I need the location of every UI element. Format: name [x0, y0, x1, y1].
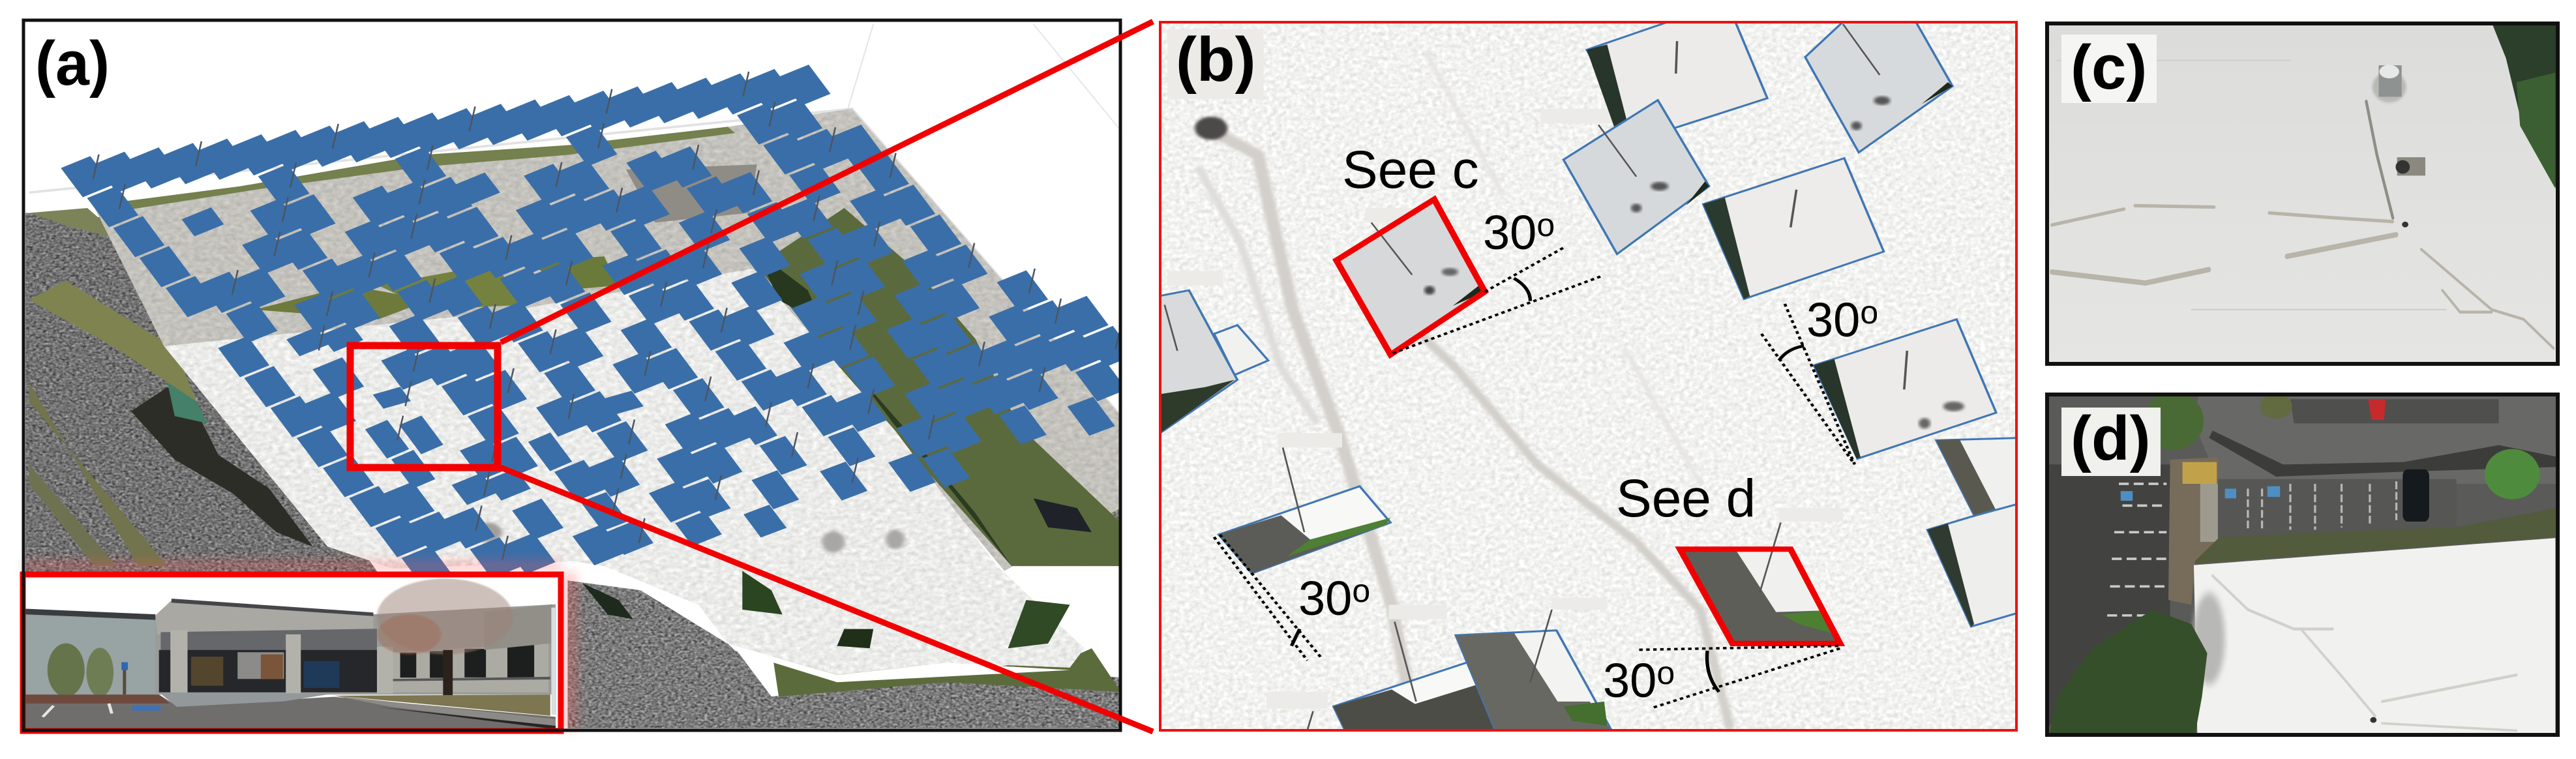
- smudge bars: [1167, 29, 1956, 709]
- cracks: [2052, 61, 2554, 348]
- label (b): (b): [1176, 25, 1256, 95]
- panel (c): oblique photo of roof: [2046, 23, 2559, 366]
- label background (d): [2061, 408, 2161, 476]
- top parking lot: [2195, 394, 2559, 484]
- red selection box on roof: [350, 346, 498, 468]
- trees: [2485, 449, 2540, 499]
- zoom connector lines: [501, 22, 1153, 732]
- sidewalk and mulch: [2168, 457, 2218, 605]
- panel (a): point cloud with camera positions: [23, 20, 1255, 731]
- lower parking lot: [2218, 479, 2457, 537]
- annotation see c: See c: [1342, 140, 1479, 200]
- camera frame 4: [1703, 158, 1884, 299]
- angle label 3: o: [1352, 573, 1370, 609]
- roof cracks: [1199, 53, 1730, 726]
- left camera frames: [1159, 290, 1268, 434]
- trees: [2492, 23, 2559, 194]
- inset glow: [23, 561, 577, 730]
- right camera frames: [1928, 438, 2020, 627]
- angle label 1: 30: [1483, 205, 1536, 260]
- camera frame see c: [1336, 200, 1485, 355]
- panel (d): nadir photo of roof and parking: [2046, 392, 2559, 736]
- point cloud ground and roof: [25, 24, 1121, 728]
- panel frame (b): [1160, 22, 2016, 730]
- hedge: [2195, 508, 2555, 563]
- roof texture: [1159, 22, 2018, 730]
- bottom camera frames: [1334, 631, 1613, 733]
- left pavement: [2046, 464, 2170, 730]
- camera planes: blue image frames: [61, 65, 1119, 571]
- label (d): (d): [2071, 404, 2151, 473]
- inset: building photo: [23, 574, 561, 731]
- annotation see d: See d: [1616, 469, 1756, 528]
- label (c): (c): [2071, 33, 2147, 102]
- camera frame 1: [1587, 22, 1767, 140]
- panel frame (a): [23, 20, 1120, 730]
- camera frame 5: [1814, 320, 1996, 458]
- bottom left tree: [2050, 610, 2208, 736]
- camera frame see d: [1680, 522, 1840, 644]
- angle label 2: o: [1860, 294, 1878, 331]
- angle label 2: 30: [1806, 293, 1860, 347]
- lower left camera frame: [1219, 447, 1390, 573]
- angle label 4: 30: [1603, 653, 1656, 707]
- angle label 3: 30: [1298, 571, 1352, 625]
- label (a): (a): [35, 29, 110, 98]
- panel frame (d): [2047, 394, 2558, 735]
- label background (c): [2061, 35, 2157, 103]
- panel frame (c): [2047, 23, 2558, 364]
- dotted angle lines: [1214, 246, 1855, 707]
- camera frame 2: [1563, 100, 1709, 254]
- angle label 4: o: [1656, 655, 1675, 691]
- camera frame 3: [1805, 22, 1953, 153]
- roof vents: [2373, 72, 2406, 102]
- white roof: [2194, 538, 2555, 736]
- angle label 1: o: [1536, 207, 1555, 243]
- panel (b): zoomed oblique cameras over roof: [1159, 22, 2020, 733]
